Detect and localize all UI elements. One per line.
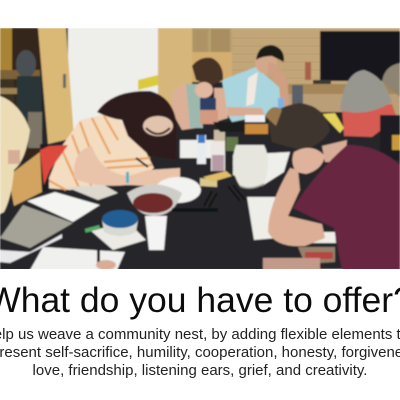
photo: group around a table (0, 28, 400, 269)
white pitcher and papers (233, 145, 290, 188)
person: woman in maroon t-shirt, head down (247, 103, 400, 270)
person: blue shirt man (222, 45, 289, 122)
background room (0, 28, 400, 269)
person: grey beanie and red hair (322, 63, 400, 160)
table (0, 112, 345, 270)
body text: love, friendship, listening ears, grief, and creativity. (33, 362, 367, 379)
person: woman in tank top (172, 58, 228, 130)
person: blonde woman, foreground left (0, 96, 30, 214)
snacks, bottles and pens (172, 115, 268, 212)
bowl of cherries, lidded container, cup (85, 177, 201, 250)
table items: notebook, laptop, papers (0, 185, 146, 270)
person: woman in striped shirt (8, 91, 180, 206)
